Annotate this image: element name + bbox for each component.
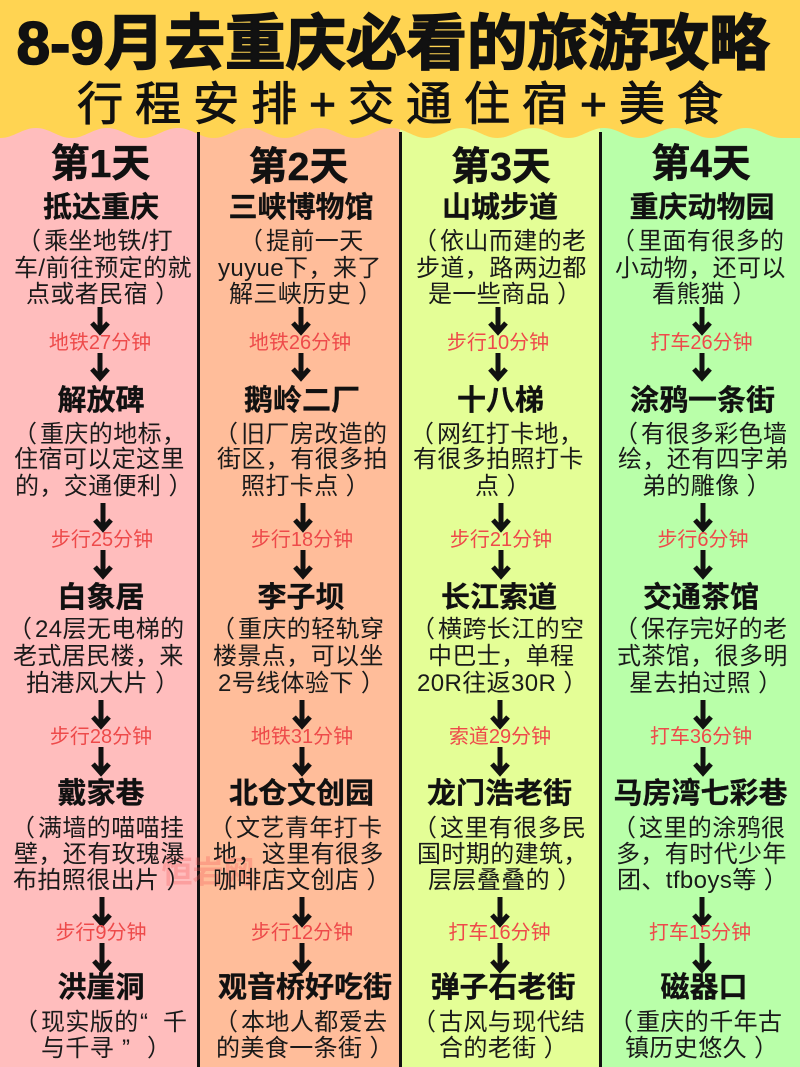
transit: 步行28分钟: 步行28分钟 (50, 725, 152, 748)
column: day 1 (8, 143, 193, 1062)
stop: 洪崖洞 (14, 971, 187, 1062)
stop: 鹅岭二厂 (214, 384, 388, 500)
panel: day 4 background (600, 120, 800, 1067)
stop: 三峡博物馆: yuyue下，来了 (218, 255, 382, 282)
transit: 地铁26分钟: 地铁26分钟 (249, 331, 351, 354)
transit: 步行6分钟 (657, 503, 749, 577)
stop: 观音桥好吃街 (214, 971, 394, 1062)
stop: 观音桥好吃街: 的美食一条街 ） (216, 1035, 394, 1062)
transit: 打车26分钟 (650, 307, 753, 379)
stop: 鹅岭二厂: 旧厂房改造的 (241, 421, 387, 448)
watermark: 恒岩网 (162, 855, 254, 890)
title: 8-9月去重庆必看的旅游攻略 (17, 9, 770, 77)
stop: 三峡博物馆 (218, 191, 382, 308)
stop: 重庆动物园: 里面有很多的 (638, 228, 784, 255)
stop: 观音桥好吃街: 本地人都爱去 (241, 1009, 387, 1036)
stop: 鹅岭二厂: 街区，有很多拍 (217, 446, 388, 473)
stop: 洪崖洞: 洪崖洞 (57, 971, 145, 1004)
stop: 龙门浩老街: 层层叠叠的 ） (428, 867, 581, 894)
stop: 三峡博物馆: 三峡博物馆 (228, 191, 374, 224)
stop: 三峡博物馆: 解三峡历史 ） (229, 281, 382, 308)
stop: 洪崖洞: 与千寻 (41, 1035, 114, 1062)
stop: 白象居: 白象居 (57, 581, 145, 614)
stop: 山城步道: 是一些商品 ） (428, 281, 581, 308)
stop: 涂鸦一条街: （ (614, 421, 638, 448)
stop: 涂鸦一条街: 弟的雕像 ） (642, 473, 771, 500)
stop: 交通茶馆: （ (614, 616, 638, 643)
stop: 北仓文创园: 文艺青年打卡 (236, 815, 382, 842)
transit: 打车36分钟: 打车36分钟 (650, 725, 752, 748)
transit: 打车16分钟: 打车16分钟 (448, 921, 551, 944)
stop: 交通茶馆: 星去拍过照 ） (629, 670, 782, 697)
stop: 马房湾七彩巷: （ (612, 815, 636, 842)
stop: 长江索道: 20R往返30R ） (417, 670, 588, 697)
stop: 马房湾七彩巷 (612, 776, 788, 894)
stop: 戴家巷: 戴家巷 (57, 777, 145, 810)
transit: 打车16分钟 (448, 897, 551, 971)
transit: 地铁26分钟 (249, 307, 351, 379)
stop: 李子坝: 楼景点，可以坐 (213, 643, 384, 670)
stop: 涂鸦一条街: 绘，还有四字弟 (618, 446, 789, 473)
stop: 磁器口 (609, 971, 782, 1062)
stop: 马房湾七彩巷: 团、tfboys等 ） (617, 867, 788, 894)
stop: 弹子石老街: 古风与现代结 (439, 1009, 585, 1036)
transit: 步行12分钟 (251, 897, 353, 971)
transit: 步行18分钟: 步行18分钟 (251, 528, 353, 551)
stop: 弹子石老街: 弹子石老街 (430, 971, 576, 1004)
stop: 北仓文创园: （ (209, 815, 233, 842)
heading: day 2: 第2天 (249, 146, 348, 189)
transit: 步行6分钟: 步行6分钟 (657, 528, 749, 551)
stop: 白象居: 老式居民楼，来 (13, 643, 184, 670)
stop: 龙门浩老街: （ (413, 815, 437, 842)
stop: 李子坝: 重庆的轻轨穿 (238, 616, 384, 643)
stop: 重庆动物园: 看熊猫 ） (652, 281, 757, 308)
stop: 长江索道 (411, 581, 588, 697)
stop: 弹子石老街 (412, 971, 585, 1062)
stop: 山城步道: 依山而建的老 (440, 228, 586, 255)
transit: 打车26分钟: 打车26分钟 (650, 331, 753, 354)
stop: 磁器口: 重庆的千年古 (636, 1009, 782, 1036)
stop: 山城步道 (413, 191, 587, 308)
stop: 马房湾七彩巷: 马房湾七彩巷 (613, 776, 788, 810)
stop: 洪崖洞: 现实版的 (41, 1009, 139, 1036)
panel: day 1 background (0, 120, 198, 1067)
stop: 白象居: 24层无电梯的 (35, 616, 184, 643)
stop: 马房湾七彩巷: 多，有时代少年 (616, 841, 787, 868)
stop: 戴家巷 (11, 777, 191, 894)
transit: 步行12分钟: 步行12分钟 (251, 921, 353, 944)
stop: 十八梯: 有很多拍照打卡 (413, 446, 584, 473)
stop: 龙门浩老街 (413, 777, 588, 894)
stop: 涂鸦一条街: 有很多彩色墙 (641, 421, 787, 448)
transit: 地铁27分钟 (49, 307, 151, 379)
stop: 涂鸦一条街: 涂鸦一条街 (630, 384, 775, 417)
transit: 步行9分钟: 步行9分钟 (55, 921, 147, 944)
stop: 交通茶馆: 式茶馆，很多明 (617, 643, 788, 670)
panel: day 3 background (400, 120, 600, 1067)
stop: 山城步道: 山城步道 (442, 191, 558, 224)
stop: 鹅岭二厂: （ (214, 421, 238, 448)
transit: 打车15分钟: 打车15分钟 (649, 921, 751, 944)
stop: 重庆动物园: 重庆动物园 (629, 191, 775, 224)
stop: 弹子石老街: （ (412, 1009, 436, 1036)
stop: 戴家巷: 满墙的喵喵挂 (38, 815, 184, 842)
transit: 步行10分钟 (447, 307, 549, 379)
stop: 解放碑: （ (13, 421, 37, 448)
stop: 抵达重庆: （ (17, 228, 41, 255)
stop: 山城步道: 步道，路两边都 (416, 255, 587, 282)
subtitle: 行程安排+交通住宿+美食 (77, 78, 735, 130)
transit: 步行9分钟 (55, 897, 147, 971)
stop: 李子坝: 2号线体验下 ） (218, 670, 385, 697)
transit: 地铁31分钟: 地铁31分钟 (251, 725, 353, 748)
stop: 重庆动物园: （ (611, 228, 635, 255)
stop: 白象居: （ (8, 616, 32, 643)
stop: 磁器口: 镇历史悠久 ） (625, 1035, 778, 1062)
stop: 观音桥好吃街: 观音桥好吃街 (218, 971, 392, 1004)
stop: 白象居 (8, 581, 184, 697)
stop: 弹子石老街: 合的老街 ） (439, 1035, 568, 1062)
stop: 戴家巷: 壁，还有玫瑰瀑 (14, 841, 185, 868)
column: day 2 (209, 146, 394, 1062)
heading: day 3: 第3天 (451, 146, 551, 189)
stop: 龙门浩老街: 这里有很多民 (440, 815, 586, 842)
stop: 三峡博物馆: （ (239, 228, 263, 255)
stop: 北仓文创园: 北仓文创园 (229, 777, 374, 810)
stop: 解放碑: 住宿可以定这里 (14, 446, 185, 473)
stop: 抵达重庆 (14, 191, 192, 308)
stop: 鹅岭二厂: 鹅岭二厂 (244, 384, 360, 417)
stop: 洪崖洞: ” (122, 1035, 130, 1062)
stop: 鹅岭二厂: 照打卡点 ） (241, 473, 370, 500)
transit: 步行10分钟: 步行10分钟 (447, 331, 549, 354)
stop: 洪崖洞: 千 (163, 1009, 187, 1036)
stop: 十八梯 (410, 384, 584, 500)
stop: 洪崖洞: （ (14, 1009, 38, 1036)
stop: 北仓文创园: 咖啡店文创店 ） (213, 867, 391, 894)
stop: 山城步道: （ (413, 228, 437, 255)
stop: 十八梯: 点 ） (475, 473, 531, 500)
transit: 索道29分钟 (449, 700, 551, 774)
transit: 步行25分钟: 步行25分钟 (51, 528, 153, 551)
stop: 长江索道: （ (411, 616, 435, 643)
transit: 步行25分钟 (51, 503, 153, 577)
stop: 马房湾七彩巷: 这里的涂鸦很 (639, 815, 785, 842)
transit: 步行21分钟 (450, 503, 552, 577)
column: day 4 (609, 143, 789, 1062)
transit: 索道29分钟: 索道29分钟 (449, 725, 551, 748)
stop: 十八梯: 网红打卡地， (437, 421, 583, 448)
stop: 重庆动物园 (611, 191, 786, 308)
stop: 北仓文创园: 地，这里有很多 (213, 841, 384, 868)
column: day 3 (410, 146, 588, 1062)
stop: 解放碑: 的，交通便利 ） (15, 473, 193, 500)
stop: 磁器口: （ (609, 1009, 633, 1036)
stop: 戴家巷: 布拍照很出片 ） (13, 867, 191, 894)
heading: day 4: 第4天 (651, 143, 751, 186)
stop: 抵达重庆: 抵达重庆 (43, 191, 159, 224)
stop: 龙门浩老街: 国时期的建筑， (417, 841, 588, 868)
transit: 地铁31分钟 (251, 700, 353, 774)
stop: 涂鸦一条街 (614, 384, 789, 500)
stop: 长江索道: 长江索道 (441, 581, 557, 614)
stop: 龙门浩老街: 龙门浩老街 (427, 777, 572, 810)
stop: 长江索道: 中巴士，单程 (428, 643, 574, 670)
transit: 步行21分钟: 步行21分钟 (450, 528, 552, 551)
stop: 洪崖洞: “ (140, 1009, 148, 1036)
stop: 重庆动物园: 小动物，还可以 (615, 255, 786, 282)
transit: 打车15分钟 (649, 897, 751, 971)
heading: day 1: 第1天 (51, 143, 150, 186)
stop: 交通茶馆: 保存完好的老 (641, 616, 787, 643)
transit: 步行18分钟 (251, 503, 353, 577)
stop: 三峡博物馆: 提前一天 (266, 228, 364, 255)
stop: 戴家巷: （ (11, 815, 35, 842)
stop: 解放碑: 重庆的地标， (40, 421, 186, 448)
stop: 长江索道: 横跨长江的空 (438, 616, 584, 643)
stop: 解放碑 (13, 384, 193, 500)
stop: 白象居: 拍港风大片 ） (26, 670, 179, 697)
stop: 李子坝 (211, 581, 385, 697)
stop: 十八梯: （ (410, 421, 434, 448)
stop: 十八梯: 十八梯 (457, 384, 544, 417)
stop: 洪崖洞: ） (147, 1035, 171, 1062)
panel: day 2 background (198, 120, 400, 1067)
stop: 抵达重庆: 乘坐地铁/打 (44, 228, 173, 255)
yellow header band with wavy edge (0, 0, 800, 138)
transit: 地铁27分钟: 地铁27分钟 (49, 331, 151, 354)
stop: 交通茶馆: 交通茶馆 (643, 581, 759, 614)
transit: 步行28分钟 (50, 700, 152, 774)
stop: 交通茶馆 (614, 581, 788, 697)
stop: 抵达重庆: 车/前往预定的就 (14, 255, 192, 282)
stop: 北仓文创园 (209, 777, 391, 894)
stop: 抵达重庆: 点或者民宿 ） (26, 281, 179, 308)
stop: 李子坝: 李子坝 (257, 581, 345, 614)
stop: 磁器口: 磁器口 (660, 971, 748, 1004)
stop: 李子坝: （ (211, 616, 235, 643)
transit: 打车36分钟 (650, 700, 752, 774)
stop: 解放碑: 解放碑 (57, 384, 145, 417)
stop: 观音桥好吃街: （ (214, 1009, 238, 1036)
